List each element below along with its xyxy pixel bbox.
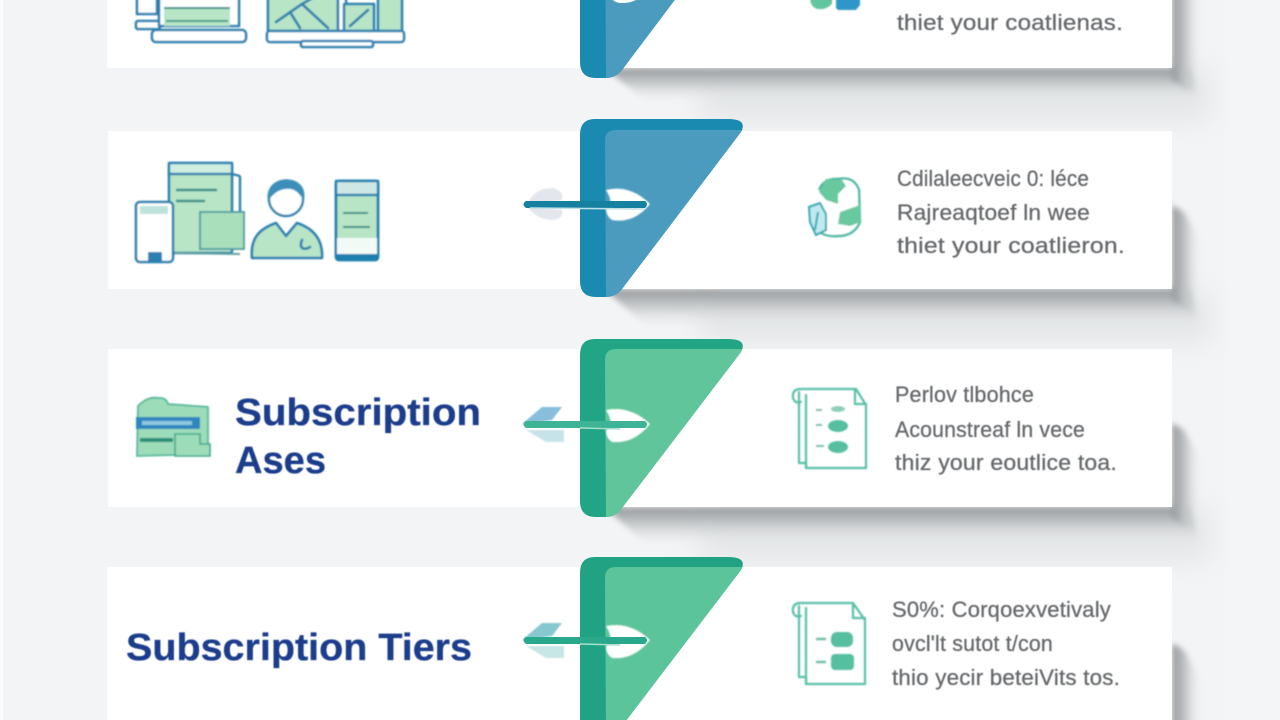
text block row 2 right [897,166,1125,258]
soft haze around the card shadows [700,70,1210,560]
shadows under the cards [604,0,1200,720]
panel: row 1 card [107,0,1172,68]
connector row 4 [522,557,743,720]
text block row 3 right: Perlov tlbohce [895,382,1034,407]
icon: laptops row 1 left [136,0,404,47]
text block row 3 right: Acounstreaf ln vece [895,417,1085,442]
text block row 2 right: Rajreaqtoef ln wee [897,200,1090,225]
connector row 1 [580,0,743,78]
text block row 4 right: ovcl'lt sutot t/con [892,631,1053,656]
heading: Subscription Tiers: Subscription Tiers [126,627,472,669]
text block row 4 right: thio yecir beteiVits tos. [892,665,1120,690]
heading: Subscription Ases: Ases [235,440,326,482]
icon: document row 3 right [793,389,866,468]
icon: devices and person row 2 left [136,163,378,262]
icon: folder row 3 left [136,398,210,456]
heading: Subscription Ases: Subscription [235,392,481,434]
icon: document row 4 right [793,603,865,684]
text block row 3 right [895,382,1117,475]
text block row 4 right [892,597,1120,690]
icon: recycle row 2 right [809,178,861,236]
text block row 2 right: thiet your coatlieron. [897,233,1125,258]
panel: row 2 card [108,131,1172,289]
text block row 3 right: thiz your eoutlice toa. [895,450,1117,475]
arrow row 3 [522,407,650,442]
text block row 1 right: thiet your coatlienas. [897,10,1123,35]
panel: row 3 card [108,349,1172,507]
arrow row 4 [522,623,650,658]
panel: row 4 card [107,567,1172,720]
heading: Subscription Ases [235,392,481,482]
text block row 4 right: S0%: Corqoexvetivaly [892,597,1111,622]
icon: row 1 right [810,0,860,10]
arrow row 2 [524,188,650,221]
connector row 3 [522,339,743,517]
text block row 2 right: Cdilaleecveic 0: léce [897,166,1089,191]
connector row 2 [524,119,743,297]
